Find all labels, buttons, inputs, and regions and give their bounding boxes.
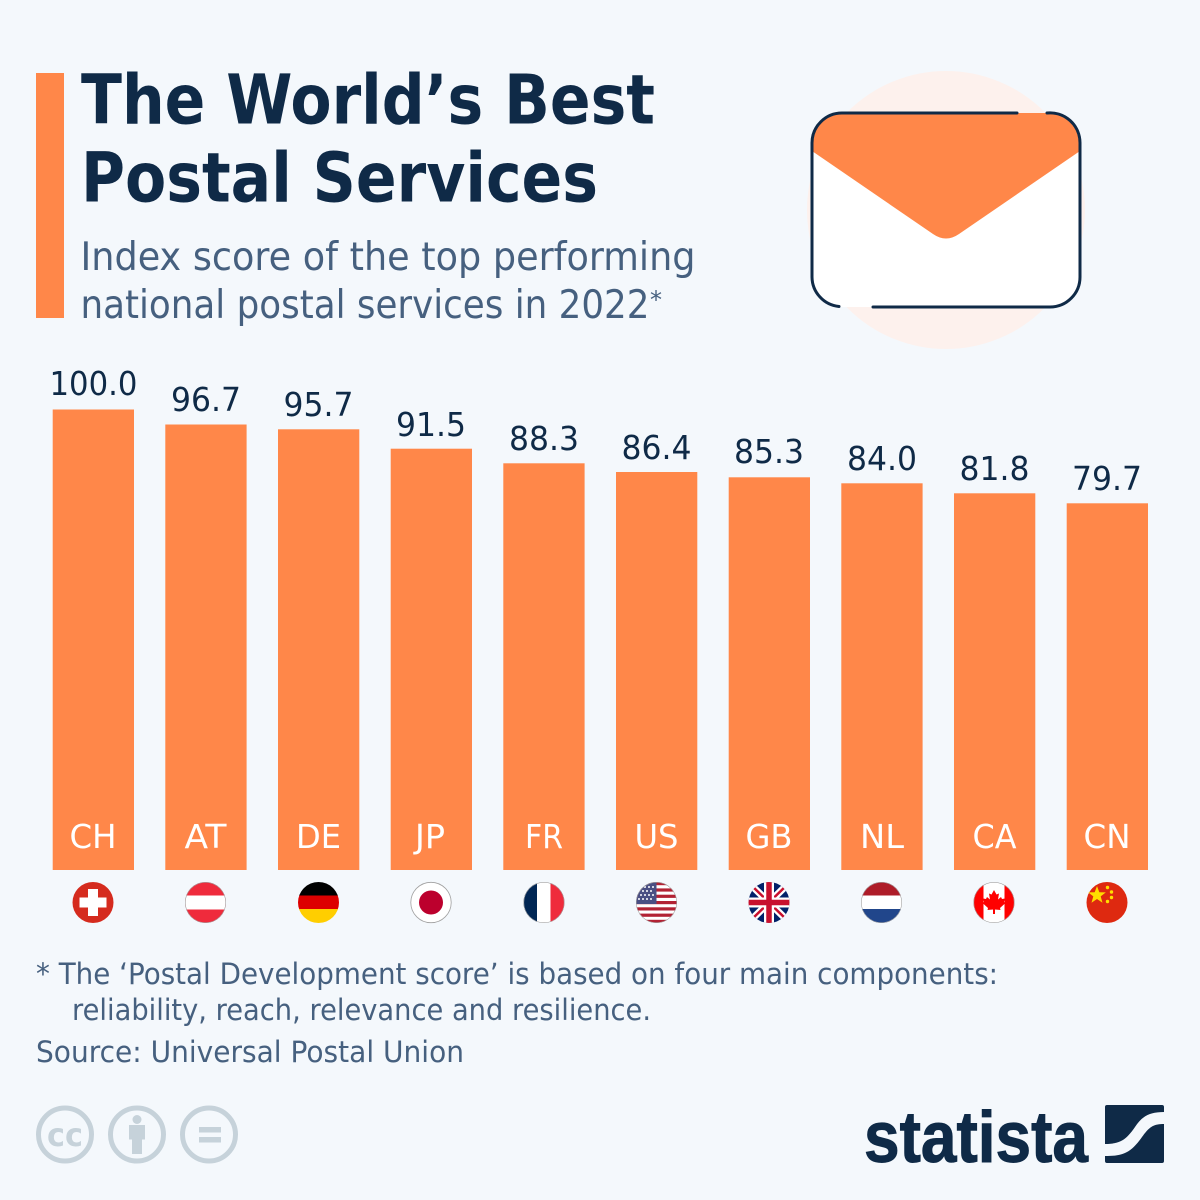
icon: creative commons licence: cc — [47, 1116, 83, 1154]
icon: flag Switzerland — [72, 882, 114, 923]
value labels: 79.7 — [1072, 459, 1142, 498]
value labels — [50, 364, 1142, 498]
title: Postal Services — [81, 138, 598, 218]
value labels: 86.4 — [622, 428, 692, 467]
title — [81, 60, 655, 218]
subtitle: Index score of the top performing — [80, 235, 696, 280]
icon: statista mark — [1105, 1105, 1164, 1163]
icon: envelope — [807, 71, 1085, 349]
icon: flag Germany — [298, 882, 339, 923]
bar chart — [50, 364, 1148, 870]
source: Source: Universal Postal Union — [36, 1035, 464, 1069]
subtitle: national postal services in 2022 — [80, 283, 650, 328]
country codes: CA — [972, 817, 1017, 856]
icon: flag Canada — [973, 882, 1015, 923]
icon: flag France — [523, 882, 564, 923]
bars — [53, 410, 1148, 870]
footnote: reliability, reach, relevance and resilience. — [72, 993, 651, 1027]
title: The World’s Best — [81, 60, 655, 140]
icon: flag United Kingdom — [748, 882, 790, 924]
country codes: GB — [746, 817, 792, 856]
value labels: 91.5 — [396, 405, 466, 444]
country codes: NL — [860, 817, 905, 856]
country codes: US — [634, 817, 678, 856]
country codes: AT — [184, 817, 227, 856]
icon: flag Austria — [185, 882, 226, 923]
value labels: 84.0 — [847, 439, 917, 478]
statista logo: statista — [864, 1098, 1089, 1178]
icon: flag Netherlands — [861, 882, 902, 923]
country codes: JP — [413, 817, 445, 856]
value labels: 95.7 — [284, 385, 354, 424]
country codes: FR — [525, 817, 563, 856]
value labels: 81.8 — [960, 449, 1030, 488]
value labels: 85.3 — [734, 432, 804, 471]
subtitle: * — [650, 286, 662, 314]
footnote — [36, 957, 998, 1027]
icon: flag Japan — [411, 882, 451, 923]
country codes: DE — [296, 817, 341, 856]
country codes — [70, 817, 1130, 856]
value labels: 96.7 — [171, 380, 241, 419]
subtitle — [80, 235, 696, 328]
icon: creative commons licence — [38, 1108, 236, 1161]
title accent bar — [36, 73, 64, 318]
icon: flag United States — [636, 882, 677, 923]
value labels: 100.0 — [50, 364, 138, 403]
footnote: * The ‘Postal Development score’ is based on four main components: — [36, 957, 998, 991]
country codes: CH — [70, 817, 116, 856]
country codes: CN — [1084, 817, 1130, 856]
value labels: 88.3 — [509, 419, 579, 458]
icon: flag China — [1086, 882, 1128, 923]
